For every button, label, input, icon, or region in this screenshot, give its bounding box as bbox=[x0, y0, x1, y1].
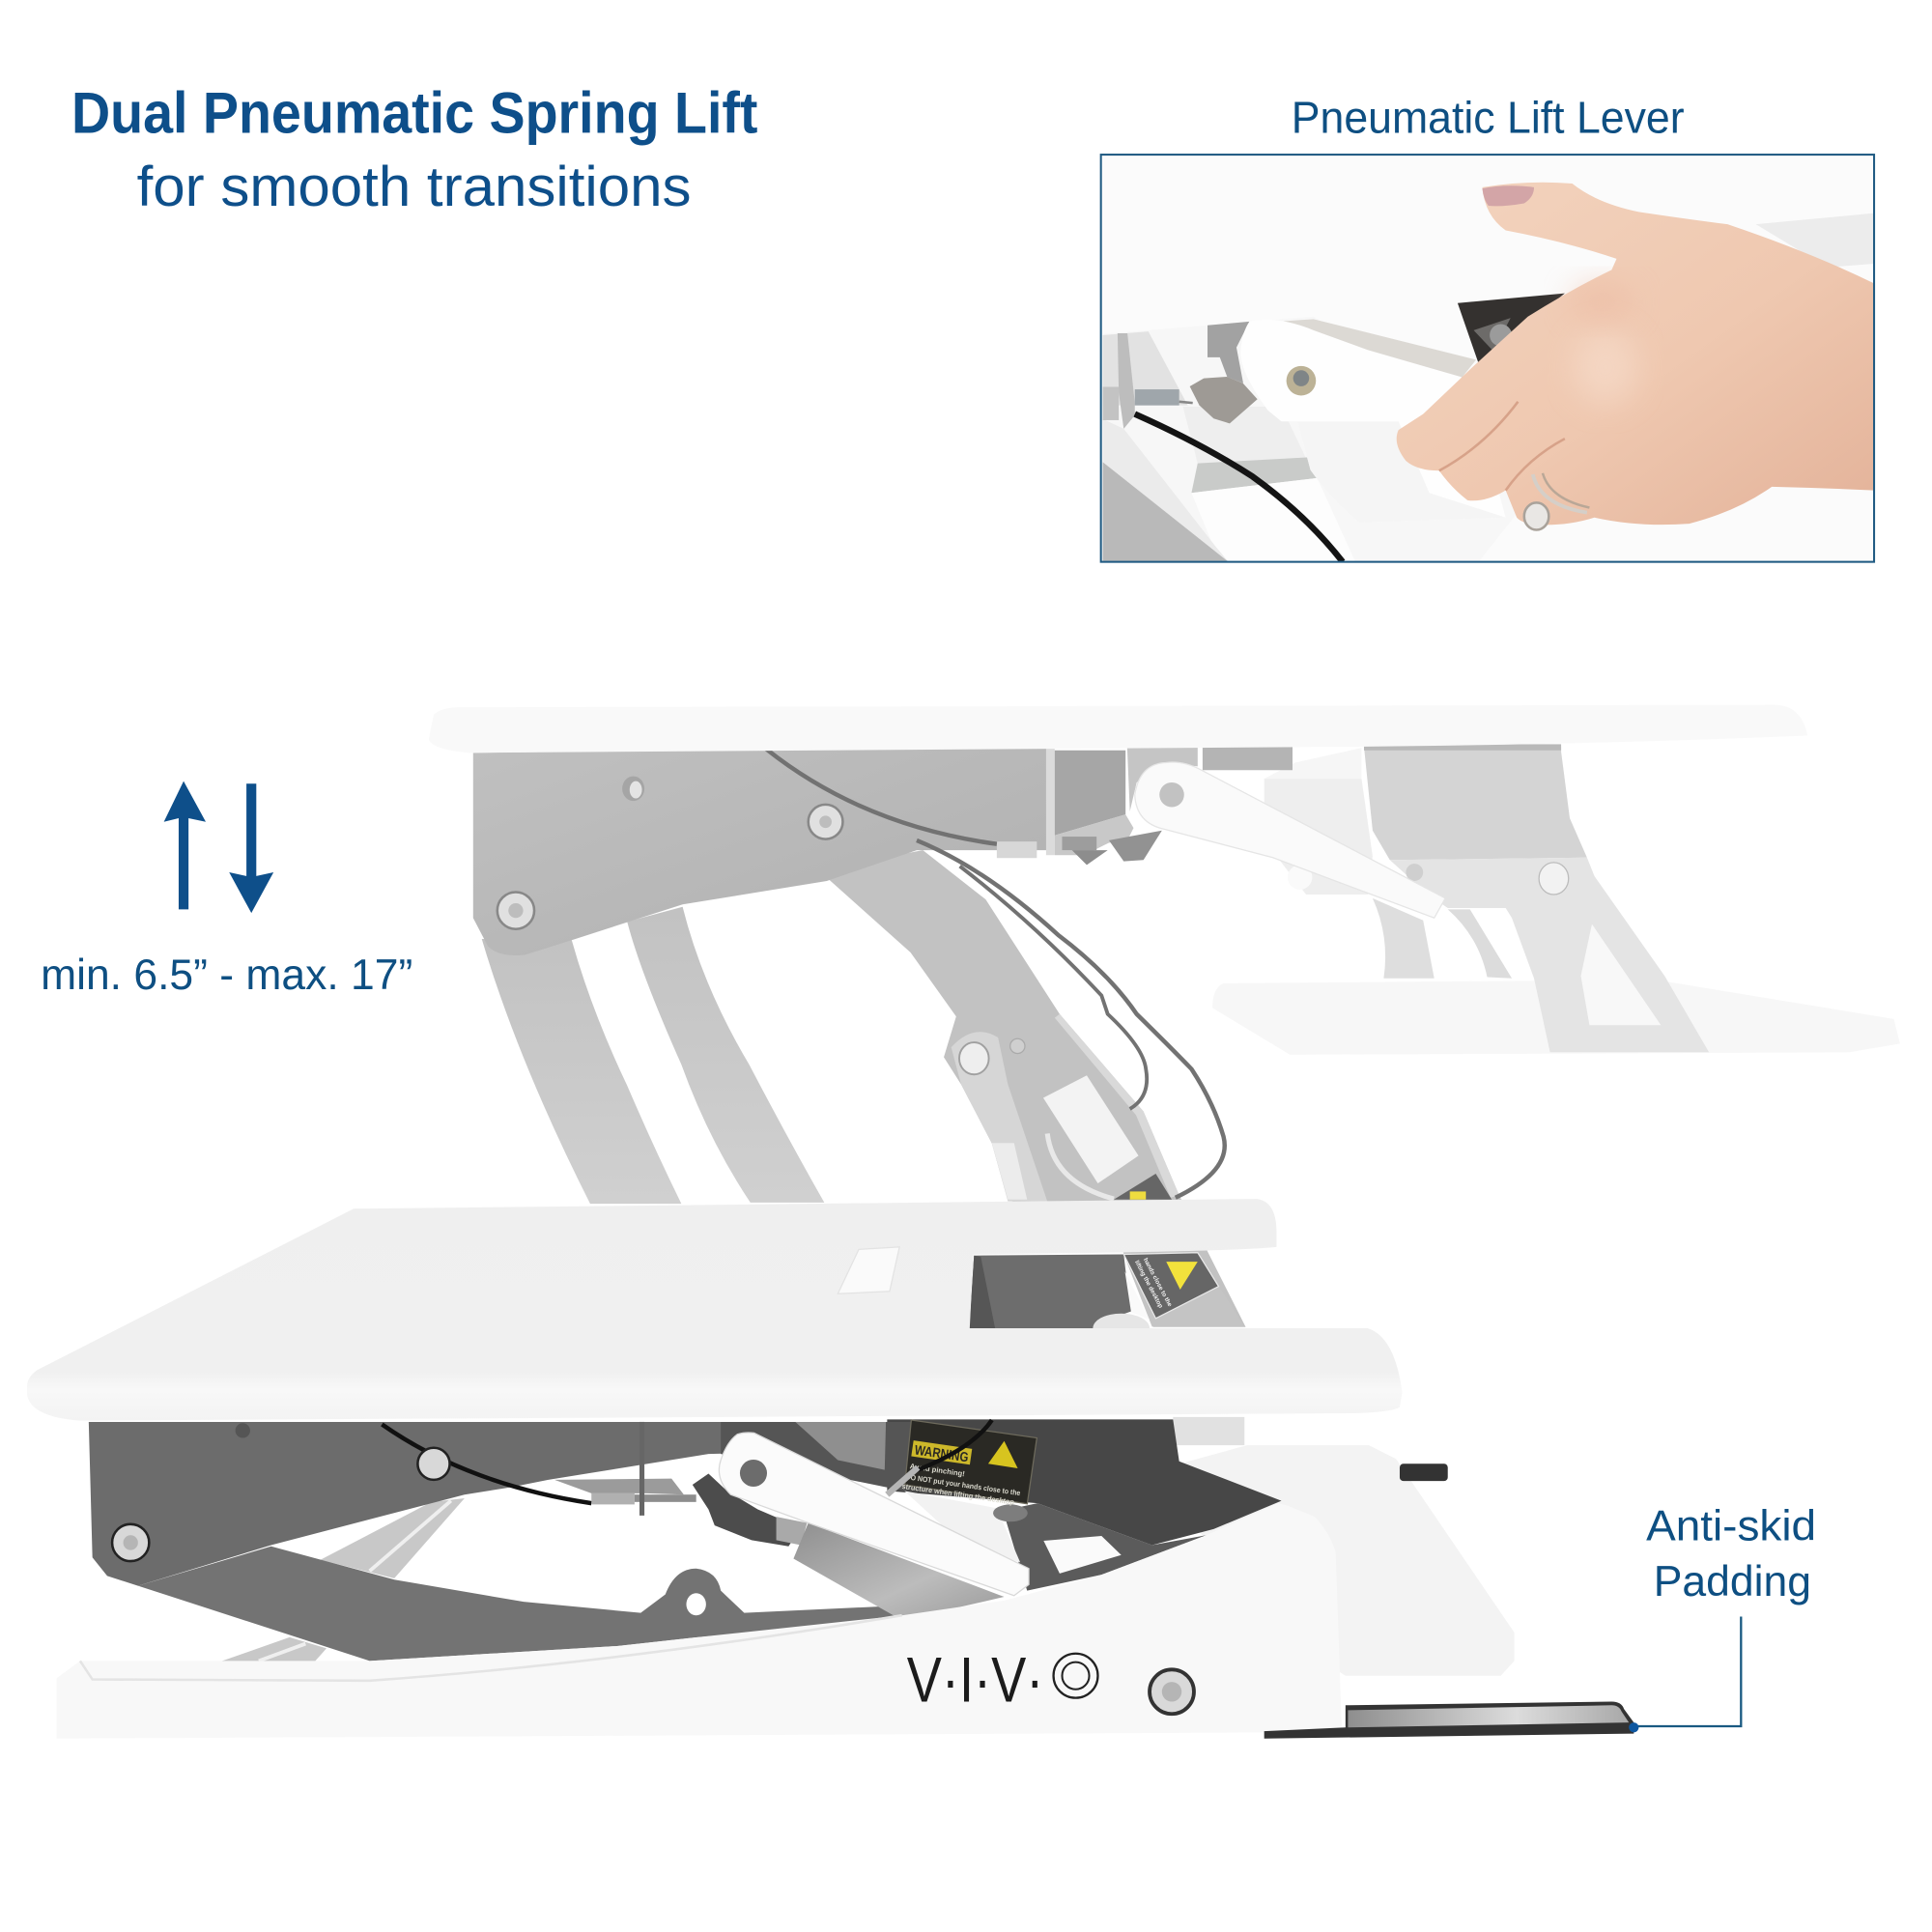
white base bbox=[57, 1503, 1342, 1739]
icon: hand bbox=[1397, 183, 1874, 529]
dark upper bracket bbox=[89, 1422, 813, 1586]
logo: VIVO: V·I·V· bbox=[907, 1644, 1043, 1716]
rear dark arm bbox=[887, 1419, 1282, 1591]
panel: pneumatic lift lever inset photo bbox=[1101, 155, 1874, 562]
callout: anti-skid padding bbox=[1629, 1502, 1816, 1732]
raised lever bbox=[1135, 762, 1445, 918]
warning sticker: structure when lifting the desktop bbox=[901, 1482, 1015, 1507]
desk raised position (faded) bbox=[429, 705, 1900, 1327]
warning sticker small bbox=[1123, 1253, 1218, 1319]
arrows: height adjustment bbox=[164, 781, 273, 913]
cable and adjuster bbox=[382, 1422, 807, 1547]
desk lowered position bbox=[27, 1199, 1634, 1739]
callout: anti-skid padding: Anti-skid bbox=[1646, 1502, 1816, 1549]
warning sticker: DO NOT put your hands close to the bbox=[905, 1472, 1021, 1497]
rear foot and tab bbox=[1171, 1417, 1515, 1676]
screws bbox=[112, 1423, 450, 1561]
warning sticker: WARNING bbox=[914, 1441, 970, 1464]
raised cables bbox=[766, 750, 1225, 1198]
warning sticker small: hands close to the bbox=[1142, 1257, 1174, 1308]
pivot hole bbox=[686, 1593, 706, 1615]
callout: anti-skid padding: Padding bbox=[1654, 1558, 1811, 1605]
notch behind desktop bbox=[969, 1253, 1244, 1343]
lower cross struts bbox=[218, 1498, 465, 1662]
title bbox=[71, 81, 757, 218]
raised scissor arms bbox=[482, 850, 1246, 1327]
heading: pneumatic lift lever: Pneumatic Lift Lever bbox=[1292, 93, 1685, 143]
warning sticker bbox=[887, 1420, 1037, 1507]
title: for smooth transitions bbox=[137, 156, 692, 218]
desktop handle slot bbox=[838, 1247, 899, 1293]
lowered desktop bbox=[27, 1199, 1403, 1421]
piston cylinder bbox=[793, 1523, 1005, 1620]
warning sticker: Avoid pinching! bbox=[909, 1462, 965, 1478]
raised top bracket bbox=[473, 746, 1048, 955]
warning sticker small: lifting the desktop bbox=[1133, 1260, 1164, 1310]
raised rear support and foot bbox=[1212, 744, 1900, 1055]
title: Dual Pneumatic Spring Lift bbox=[71, 81, 757, 146]
anti-skid pad bbox=[1264, 1701, 1634, 1739]
dark lower arm bbox=[138, 1547, 902, 1661]
raised piston and label bbox=[952, 1032, 1172, 1202]
raised screws bbox=[497, 777, 842, 929]
base screw bbox=[1150, 1669, 1194, 1714]
height range label: min. 6.5” - max. 17” bbox=[41, 952, 412, 999]
raised desktop bbox=[429, 705, 1807, 753]
lever bbox=[719, 1433, 1029, 1596]
